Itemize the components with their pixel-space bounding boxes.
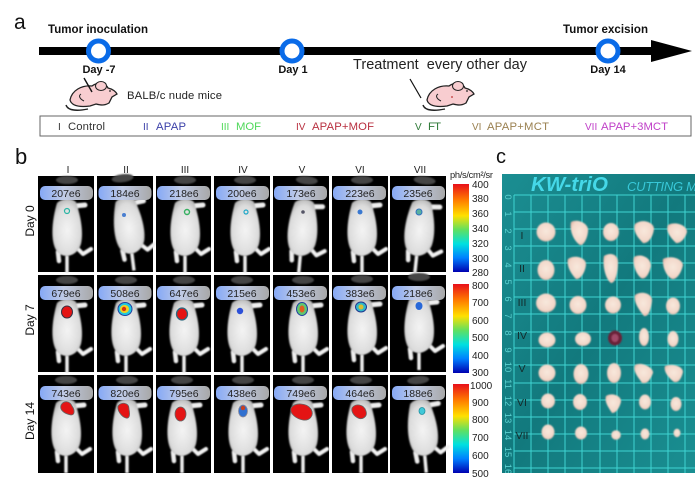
label: day -7: Day -7 [82,64,116,76]
image: day 14 group VII: 188e6 [403,388,433,400]
image: day 7 group IV [214,275,270,373]
colour bar: day 7 [453,281,489,379]
icon: inoculated mouse [66,78,117,110]
colour bar: day 7: 400 [472,351,489,362]
row label: day 0: Day 0 [23,205,37,237]
group labels on mat: IV [517,330,527,342]
panel c: excised tumors on cutting mat [496,146,697,474]
image: day 7 group VI: 383e6 [345,288,375,300]
ruler numbers: 15 [502,447,513,457]
colour bar: day 0: 400 [472,180,489,191]
image: day 0 group V [273,175,331,275]
legend: treatment groups: VI [472,122,481,133]
colour bar: day 0: 360 [472,209,489,220]
column headings: III [181,165,189,176]
group labels on mat: VI [517,397,527,409]
image: day 0 group VI [332,176,388,273]
colour scale unit: ph/s/cm²/sr [450,170,493,180]
ruler numbers: 5 [502,279,513,285]
group labels on mat: VII [516,430,528,442]
tumors: group II [538,254,683,283]
image: day 14 group I: 743e6 [51,388,81,400]
image: day 7 group V: 453e6 [286,288,316,300]
colour bar: day 0 [453,180,489,279]
image: day 14 group I [38,375,94,473]
panel letter a: a [14,11,26,34]
tumors: group IV [538,328,678,348]
label: tumor inoculation: Tumor inoculation [48,24,148,36]
column headings: VI [355,165,365,176]
ruler numbers: 4 [502,262,513,268]
image: day 14 group III: 795e6 [169,388,199,400]
colour bar: day 7: 500 [472,333,489,344]
icon: treated mouse [410,79,474,110]
image: day 14 group VI: 464e6 [345,388,375,400]
colour bar: day 7: 300 [472,368,489,379]
legend: treatment groups: VII [585,122,597,133]
panel letter b: b [15,144,27,169]
label: day 1: Day 1 [278,64,308,76]
column headings: IV [238,165,248,176]
column headings: V [299,165,306,176]
image: day 0 group V: 173e6 [286,188,316,200]
marker: day 1 [282,41,302,61]
marker: day -7 [88,41,108,61]
image: day 0 group III: 218e6 [169,188,199,200]
group labels on mat: I [521,230,523,242]
ruler numbers: 7 [502,313,513,319]
image: day 0 group II: 184e6 [110,188,140,200]
image: day 7 group III [156,275,211,373]
group labels on mat: III [518,297,526,309]
tumors: group V [538,363,683,384]
image: day 0 group IV: 200e6 [227,188,257,200]
ruler numbers: 6 [502,296,513,302]
ruler numbers: 1 [502,211,513,217]
image: day 0 group IV [214,176,270,273]
colour bar: day 7: 700 [472,298,489,309]
ruler numbers: 11 [502,379,513,389]
panel a: experimental timeline [14,11,692,136]
image row: day 0 [38,171,449,275]
image row: day 7 [38,273,446,373]
colour bar: day 0: 300 [472,254,489,265]
column headings: I [67,165,69,176]
tumors: group VI [541,394,682,413]
ruler numbers: 9 [502,347,513,353]
colour bar: day 14 [453,381,493,480]
group labels on mat: V [518,363,526,375]
legend: treatment groups: I [58,122,61,133]
legend: treatment groups: MOF [236,121,261,133]
row label: day 7: Day 7 [23,304,37,336]
legend: treatment groups: Control [68,121,105,133]
ruler numbers: 3 [502,245,513,251]
image: day 14 group IV [214,375,270,473]
group labels on mat: II [519,263,525,275]
column headings [67,165,426,176]
colour bar: day 7: 600 [472,316,489,327]
image: day 0 group VII: 235e6 [403,188,433,200]
legend: treatment groups: APAP+MOF [312,121,374,133]
colour bar: day 0: 340 [472,224,489,235]
label: mouse strain: BALB/c nude mice [127,90,222,102]
image: day 7 group I: 679e6 [51,288,81,300]
marker: day 14 [598,41,618,61]
image: day 14 group III [156,375,211,473]
legend: treatment groups: II [143,122,149,133]
legend: treatment groups [40,116,691,136]
cutting mat photo [502,173,697,474]
colour bar: day 14: 900 [472,398,489,409]
ruler numbers: 12 [502,396,513,406]
image: day 0 group VI: 223e6 [345,188,375,200]
legend: treatment groups: III [221,122,229,133]
legend: treatment groups: V [415,122,422,133]
label: tumor excision: Tumor excision [563,24,648,36]
ruler numbers: 14 [502,430,513,440]
image: day 14 group IV: 438e6 [227,388,257,400]
image: day 7 group II [97,275,153,373]
image: day 7 group IV: 215e6 [227,288,257,300]
ruler numbers: 16 [502,464,513,474]
colour bar: day 0: 320 [472,239,489,250]
legend: treatment groups: APAP [156,121,186,133]
column headings: II [123,165,129,176]
ruler numbers: 0 [502,194,513,200]
image: day 7 group II: 508e6 [110,288,140,300]
panel letter c: c [496,146,506,168]
image: day 0 group I [38,176,94,273]
column headings: VII [414,165,426,176]
image: day 14 group VI [332,375,388,473]
ruler numbers: 13 [502,413,513,423]
label: day 14: Day 14 [590,64,627,76]
group labels on mat [516,230,528,442]
colour bar: day 0: 380 [472,194,489,205]
image: day 14 group V: 749e6 [286,388,316,400]
colour bar: day 14: 600 [472,451,489,462]
ruler numbers [505,194,512,473]
image: day 7 group III: 647e6 [169,288,199,300]
image: day 0 group III [156,176,211,273]
legend: treatment groups: APAP+MCT [487,121,549,133]
image: day 7 group VII: 218e6 [403,288,433,300]
mat caption: CUTTING M [627,179,697,194]
image: day 7 group I [38,275,94,373]
image: day 0 group II [97,171,158,272]
ruler numbers: 10 [502,362,513,372]
image: day 14 group VII [390,374,450,474]
image: day 7 group VI [332,275,388,372]
colour bar: day 14: 500 [472,469,489,480]
image: day 14 group V [273,375,329,473]
mat brand logo: KW-triO [531,173,608,196]
colour bar: day 14: 800 [472,415,489,426]
row label: day 14: Day 14 [23,402,37,440]
label: treatment schedule: Treatment every other day [353,57,528,73]
tumors: group VII [542,424,680,440]
ruler numbers: 8 [502,330,513,336]
tumors: group III [536,293,680,316]
image: day 0 group VII [390,175,449,275]
image: day 0 group I: 207e6 [51,188,81,200]
colour bar: day 7: 800 [472,281,489,292]
ruler numbers: 2 [502,228,513,234]
colour bar: day 0: 280 [472,268,489,279]
legend: treatment groups: FT [428,121,441,133]
image row: day 14 [38,374,450,474]
colour bar: day 14: 700 [472,433,489,444]
image: day 7 group VII [390,273,446,372]
image: day 14 group II: 820e6 [110,388,140,400]
panel b: bioluminescence imaging [15,144,493,480]
image: day 14 group II [97,375,153,473]
legend: treatment groups: IV [296,122,306,133]
tumors: group I [536,221,687,245]
legend: treatment groups: APAP+3MCT [601,121,668,133]
timeline arrow [39,40,692,62]
colour bar: day 14: 1000 [470,381,493,392]
image: day 7 group V [273,275,329,373]
